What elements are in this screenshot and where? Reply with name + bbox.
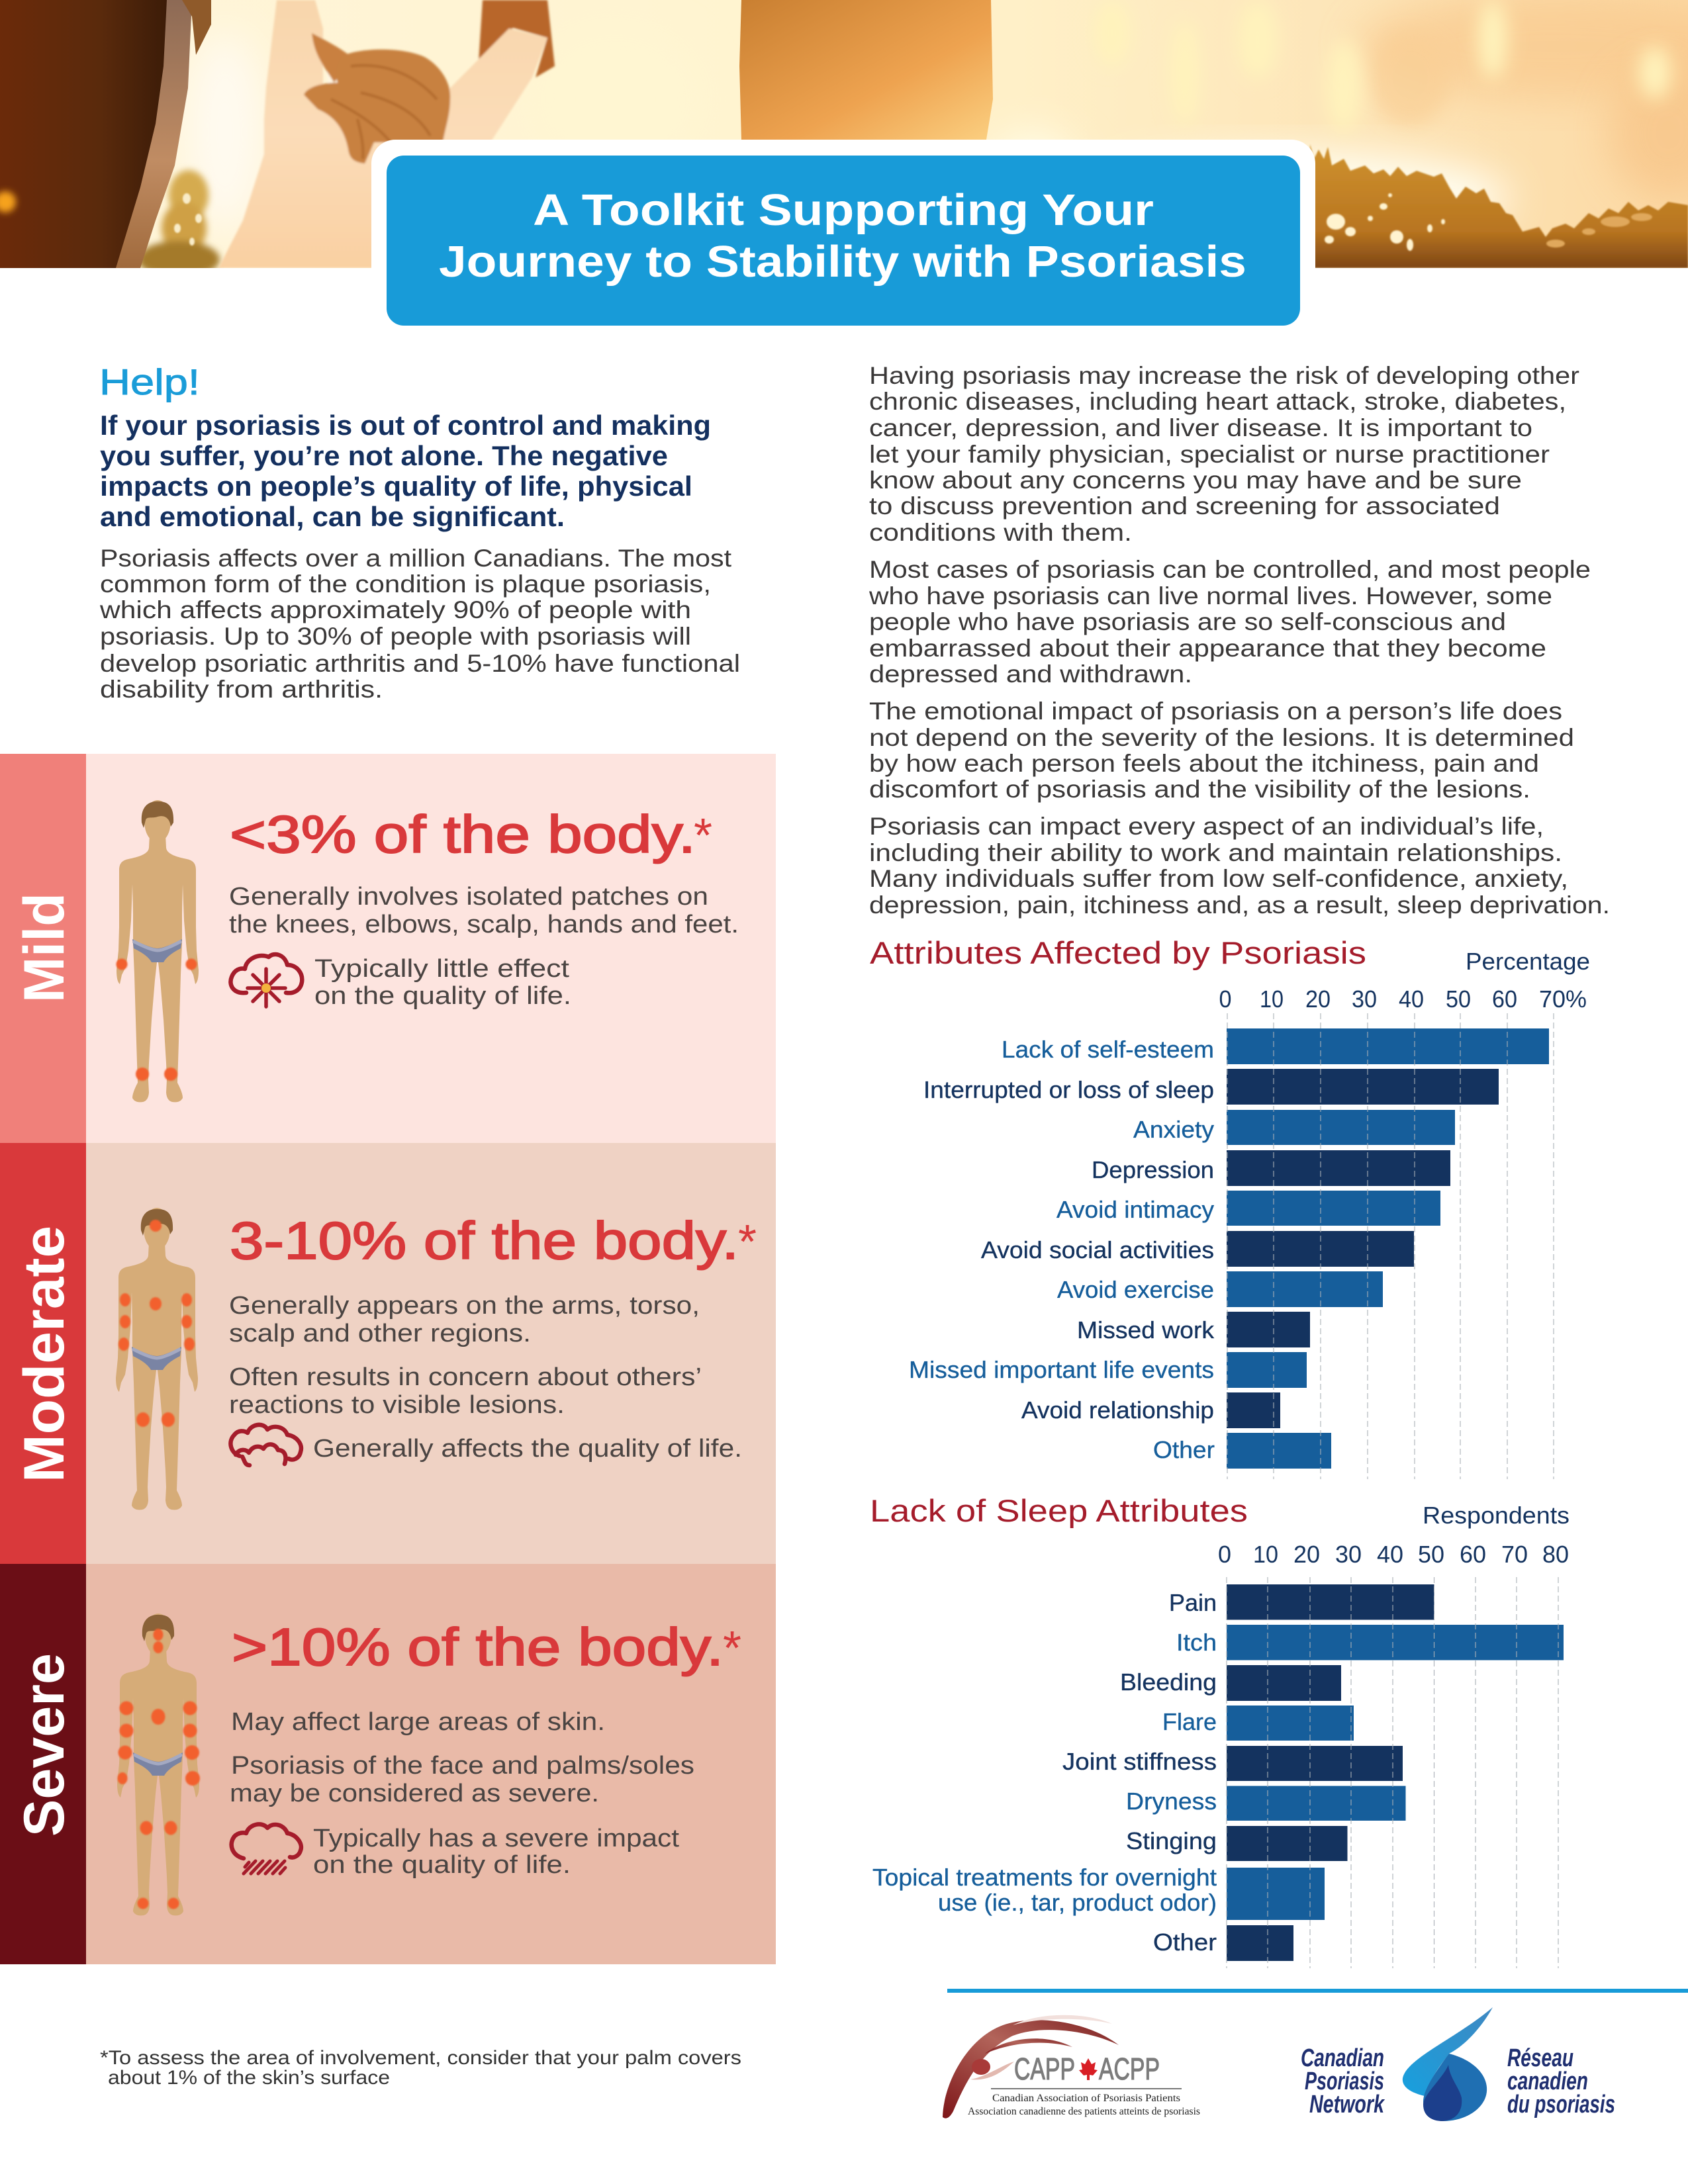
axis tick labels: 10 (1260, 985, 1284, 1013)
bar labels (872, 1589, 1217, 1956)
heading: under 3 percent: * (694, 809, 712, 862)
heading: over 10 percent: * (723, 1622, 741, 1675)
heading: over 10 percent: >10% of the body. (232, 1617, 724, 1676)
chart: attributes affected by psoriasis (870, 935, 1590, 1479)
adult figure right, orange torso (739, 0, 993, 140)
severe description (230, 1708, 694, 1807)
sunlit tree at left (138, 170, 220, 278)
bar labels: Other (1153, 1436, 1215, 1463)
bar labels: Avoid intimacy (1056, 1196, 1214, 1223)
french wordmark: du psoriasis (1507, 2091, 1615, 2118)
title box (371, 140, 1315, 338)
lead paragraph (100, 410, 711, 532)
body figure: mild (117, 800, 199, 1102)
logo wordmark (968, 2052, 1200, 2117)
axis tick labels: 0 (1218, 1541, 1231, 1568)
right column text: discomfort of psoriasis and the visibility of the lesions. (869, 776, 1530, 803)
bar labels: Lack of self-esteem (1002, 1036, 1214, 1063)
english wordmark: Canadian (1301, 2044, 1384, 2072)
right column text: Having psoriasis may increase the risk of developing other (869, 362, 1579, 389)
mild quality of life note: Typically little effect (314, 955, 570, 983)
axis tick labels: 80 (1542, 1541, 1569, 1568)
right column text: depression, pain, itchiness and, as a result, sleep deprivation. (869, 891, 1610, 919)
axis tick labels: 50 (1446, 985, 1471, 1013)
right column text: The emotional impact of psoriasis on a person’s life does (869, 698, 1562, 725)
severity label: Severe: Severe (13, 1653, 76, 1837)
intro body text: psoriasis. Up to 30% of people with psoriasis will (100, 623, 691, 650)
french wordmark (1507, 2044, 1615, 2118)
body figure: moderate (116, 1208, 198, 1510)
mild description (229, 883, 739, 938)
right column text: cancer, depression, and liver disease. It is important to (869, 414, 1532, 441)
bar labels: Itch (1176, 1629, 1217, 1656)
axis tick labels: 0 (1219, 985, 1231, 1013)
footnote (100, 2047, 741, 2089)
heading: 3 to 10 percent: * (738, 1216, 757, 1269)
title text (439, 185, 1246, 287)
logo: Canadian Psoriasis Network (1301, 2007, 1615, 2121)
axis tick labels: 30 (1335, 1541, 1362, 1568)
bar labels: Flare (1162, 1708, 1217, 1735)
moderate description: Generally appears on the arms, torso, (229, 1292, 700, 1320)
right column text: embarrassed about their appearance that they become (869, 635, 1546, 662)
right column text: let your family physician, specialist or nurse practitioner (869, 441, 1550, 468)
lead paragraph: If your psoriasis is out of control and making (100, 410, 711, 441)
right column text: not depend on the severity of the lesions. It is determined (869, 724, 1574, 751)
footnote: *To assess the area of involvement, consider that your palm covers (100, 2047, 741, 2069)
intro body text: disability from arthritis. (100, 676, 383, 703)
axis tick labels: 60 (1460, 1541, 1486, 1568)
axis title: percentage: Percentage (1466, 948, 1590, 975)
bar labels: Avoid exercise (1057, 1276, 1214, 1303)
intro body text (99, 545, 740, 703)
axis tick labels: 60 (1492, 985, 1517, 1013)
severe description: May affect large areas of skin. (231, 1708, 605, 1736)
bar labels: Anxiety (1133, 1116, 1214, 1143)
bar labels: Interrupted or loss of sleep (923, 1076, 1214, 1103)
bar labels: Avoid relationship (1021, 1396, 1214, 1424)
right column text: know about any concerns you may have and be sure (869, 467, 1522, 494)
right column text: Psoriasis can impact every aspect of an individual’s life, (869, 813, 1544, 840)
treeline right (1310, 144, 1688, 268)
chart: lack of sleep attributes (870, 1493, 1570, 1968)
right column text: conditions with them. (869, 519, 1132, 546)
axis tick labels (1218, 1541, 1569, 1568)
moderate description: Often results in concern about others’ (229, 1363, 702, 1391)
axis tick labels: 10 (1253, 1541, 1278, 1568)
axis tick labels: 30 (1352, 985, 1377, 1013)
lead paragraph: and emotional, can be significant. (100, 501, 565, 532)
right column text: people who have psoriasis are so self-conscious and (869, 608, 1506, 635)
heading: Help!: Help! (99, 361, 200, 402)
panel: moderate (0, 1143, 776, 1564)
moderate description: scalp and other regions. (229, 1320, 531, 1347)
adult figure left, dark trousers (0, 0, 211, 268)
intro body text: which affects approximately 90% of people with (99, 596, 691, 623)
mild description: Generally involves isolated patches on (229, 883, 708, 911)
axis tick labels: 20 (1305, 985, 1331, 1013)
icon: storm cloud (232, 1824, 301, 1874)
bar labels: Topical treatments for overnight (872, 1864, 1217, 1891)
english wordmark: Network (1309, 2091, 1385, 2118)
hero photo banner (0, 0, 1688, 278)
bar labels: Joint stiffness (1062, 1748, 1217, 1775)
severity label: Moderate: Moderate (13, 1226, 76, 1482)
bar labels: Other (1153, 1929, 1217, 1956)
drop emblem (1403, 2007, 1493, 2121)
bar labels: Missed important life events (909, 1356, 1214, 1383)
right column text (868, 362, 1610, 919)
bar labels (909, 1036, 1215, 1463)
lead paragraph: you suffer, you’re not alone. The negative (100, 440, 668, 471)
bar labels: Bleeding (1120, 1668, 1217, 1696)
title text: A Toolkit Supporting Your (533, 185, 1154, 235)
mild quality of life note (314, 955, 571, 1010)
axis tick labels: 40 (1377, 1541, 1403, 1568)
icon: double cloud (230, 1425, 301, 1465)
english wordmark: Psoriasis (1305, 2068, 1384, 2095)
severe description: may be considered as severe. (230, 1780, 599, 1807)
bars (1227, 1584, 1564, 1961)
logo mark: swooshes and figure (943, 2015, 1119, 2118)
mild description: the knees, elbows, scalp, hands and feet. (229, 911, 739, 938)
chart title: Lack of Sleep Attributes (870, 1493, 1248, 1528)
footer rule (947, 1989, 1688, 1993)
bar labels: Dryness (1126, 1788, 1217, 1815)
bar labels: Depression (1092, 1156, 1214, 1183)
axis tick labels: 70 (1501, 1541, 1528, 1568)
bar labels: Stinging (1126, 1827, 1217, 1854)
bar labels: use (ie., tar, product odor) (938, 1889, 1217, 1916)
right column text: chronic diseases, including heart attack, stroke, diabetes, (869, 388, 1566, 415)
axis tick labels (1219, 985, 1587, 1013)
axis tick labels: 50 (1418, 1541, 1444, 1568)
french wordmark: Réseau (1507, 2044, 1573, 2072)
axis tick labels: 40 (1399, 985, 1424, 1013)
severe quality of life note (313, 1825, 679, 1879)
french wordmark: canadien (1507, 2068, 1588, 2095)
logo wordmark: CAPP (1014, 2052, 1075, 2086)
right column text: who have psoriasis can live normal lives. However, some (868, 582, 1552, 610)
panel: severe (0, 1564, 776, 1964)
lead paragraph: impacts on people’s quality of life, physical (100, 471, 692, 502)
severity label: Mild: Mild (13, 893, 76, 1003)
heading: under 3 percent: <3% of the body. (230, 805, 696, 864)
logo wordmark: Canadian Association of Psoriasis Patients (992, 2093, 1180, 2104)
intro body text: common form of the condition is plaque psoriasis, (100, 570, 711, 598)
bar labels: Avoid social activities (981, 1236, 1214, 1263)
chart title: Attributes Affected by Psoriasis (870, 935, 1366, 970)
child figure with raised arms (218, 0, 555, 268)
moderate description: reactions to visible lesions. (229, 1391, 565, 1419)
moderate description (229, 1292, 702, 1419)
mild quality of life note: on the quality of life. (314, 982, 571, 1010)
severe description: Psoriasis of the face and palms/soles (231, 1752, 694, 1780)
axis title: respondents: Respondents (1423, 1502, 1570, 1529)
logo wordmark: Association canadienne des patients atteints de psoriasis (968, 2106, 1200, 2117)
right column text: by how each person feels about the itchiness, pain and (869, 750, 1539, 777)
intro body text: Psoriasis affects over a million Canadians. The most (100, 545, 732, 572)
severe quality of life note: on the quality of life. (313, 1851, 571, 1879)
severe quality of life note: Typically has a severe impact (313, 1825, 679, 1852)
bars (1227, 1028, 1549, 1469)
axis tick labels: 70% (1539, 985, 1587, 1013)
english wordmark (1301, 2044, 1385, 2118)
title text: Journey to Stability with Psoriasis (439, 237, 1246, 287)
logo wordmark: ACPP (1099, 2052, 1160, 2086)
intro body text: develop psoriatic arthritis and 5-10% have functional (100, 650, 740, 677)
bar labels: Pain (1169, 1589, 1217, 1616)
panel: mild (0, 754, 776, 1143)
moderate quality of life note: Generally affects the quality of life. (313, 1435, 742, 1463)
footnote: about 1% of the skin’s surface (108, 2067, 390, 2089)
right column text: including their ability to work and maintain relationships. (869, 839, 1562, 866)
right column text: to discuss prevention and screening for associated (869, 492, 1500, 520)
logo: CAPP ACPP (943, 2015, 1200, 2118)
intro column (99, 361, 740, 703)
axis tick labels: 20 (1293, 1541, 1320, 1568)
icon: cloud with sun (230, 954, 302, 1007)
right column text: depressed and withdrawn. (869, 660, 1192, 688)
right column text: Most cases of psoriasis can be controlled, and most people (869, 556, 1591, 583)
body figure: severe (117, 1614, 200, 1915)
right column text: Many individuals suffer from low self-confidence, anxiety, (869, 865, 1568, 892)
heading: 3 to 10 percent: 3-10% of the body. (230, 1211, 739, 1270)
bar labels: Missed work (1077, 1316, 1215, 1343)
